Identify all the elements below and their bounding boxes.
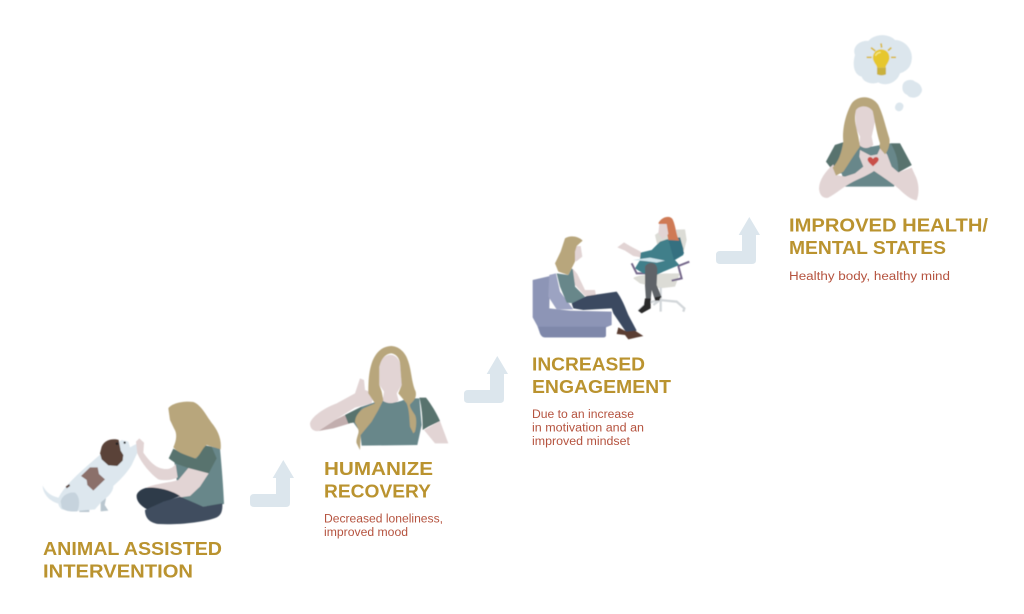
heading: improved health / mental states: MENTAL STATES [789, 237, 946, 258]
heading: improved health / mental states: IMPROVED HEALTH/ [789, 214, 988, 236]
lightbulb [867, 43, 896, 75]
text: due to an increase: improved mindset [532, 436, 631, 448]
arrow 1 [250, 460, 294, 507]
arrow 3 [716, 217, 760, 264]
text: due to an increase: Due to an increase [532, 409, 634, 421]
text: due to an increase: in motivation and an [532, 422, 644, 434]
illustration: woman high-fiving dog [43, 402, 224, 524]
heading: humanize recovery: HUMANIZE [324, 458, 433, 479]
arrow 2 [464, 356, 508, 403]
illustration: woman giving thumbs up [310, 346, 448, 450]
illustration: therapy session [533, 217, 689, 339]
heading: humanize recovery: RECOVERY [324, 480, 432, 502]
illustration: woman with heart hands and lightbulb thought [819, 35, 922, 200]
icon: heart [868, 157, 879, 166]
thought bubbles [895, 80, 922, 111]
text: healthy body, healthy mind: Healthy body, healthy mind [789, 271, 950, 283]
thought cloud [854, 35, 912, 84]
text: decreased loneliness: improved mood [324, 527, 408, 539]
heading: increased engagement: ENGAGEMENT [532, 376, 672, 397]
heading: increased engagement: INCREASED [532, 354, 645, 374]
heading: animal assisted intervention: INTERVENTION [43, 560, 193, 582]
heading: animal assisted intervention: ANIMAL ASSISTED [43, 538, 222, 559]
text: decreased loneliness: Decreased loneliness, [324, 514, 443, 526]
